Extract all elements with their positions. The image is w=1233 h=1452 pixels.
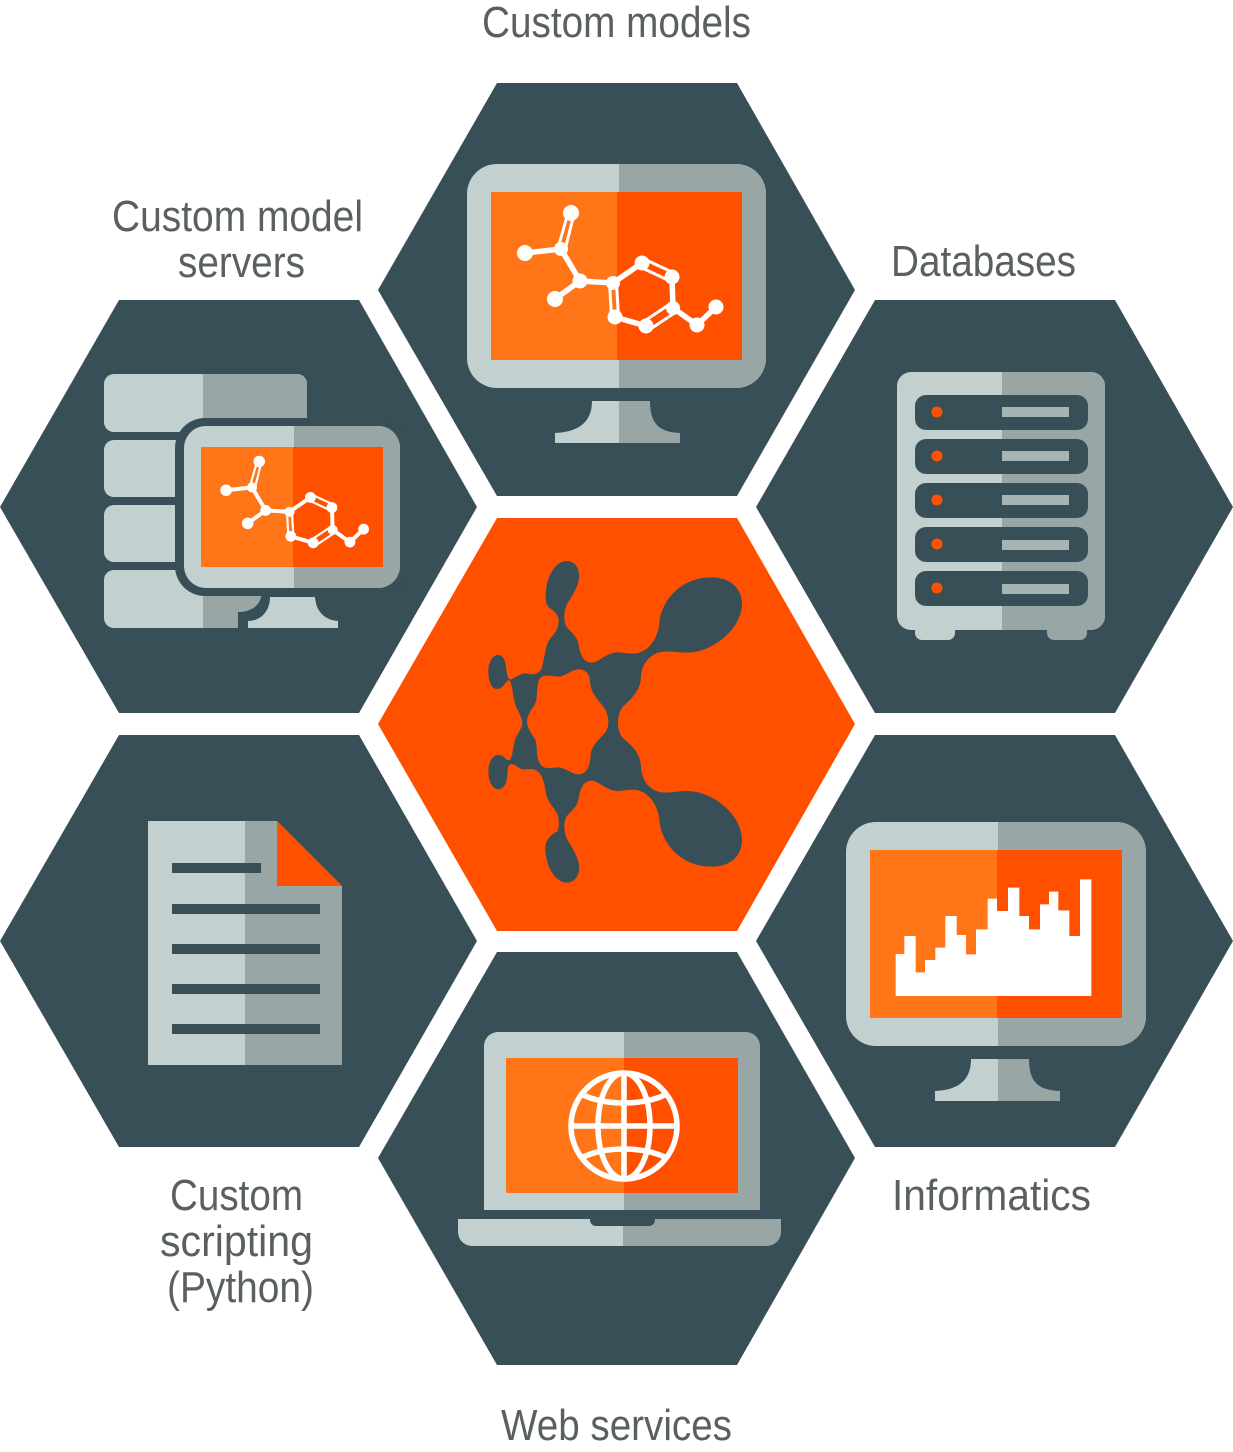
icon: server rack [897,372,1105,640]
icon: monitor with area chart [846,822,1146,1101]
label: custom scripting python: Custom [170,1171,303,1220]
label: custom scripting python: scripting [160,1217,313,1266]
label: informatics: Informatics [892,1171,1091,1220]
panel: web services hexagon [378,952,855,1365]
panel: databases hexagon [756,300,1233,713]
panel: custom model servers hexagon [0,300,477,713]
icon: document [148,821,342,1065]
panel: central orange hexagon [378,518,855,931]
label: custom model servers: Custom model [112,192,363,241]
icon: servers with monitor [104,374,408,628]
panel: custom models hexagon [378,83,855,496]
label: custom model servers [112,192,363,287]
label: web services: Web services [501,1401,732,1450]
label: databases: Databases [891,237,1076,286]
panel: informatics hexagon [756,735,1233,1147]
panel: custom scripting hexagon [0,735,477,1147]
label: custom scripting python [160,1171,314,1312]
icon: molecule blob logo [488,561,742,883]
icon: laptop with globe [458,1032,781,1246]
label: custom model servers: servers [178,238,305,287]
label: custom scripting python: (Python) [167,1263,314,1312]
icon: monitor with molecule [467,164,766,443]
